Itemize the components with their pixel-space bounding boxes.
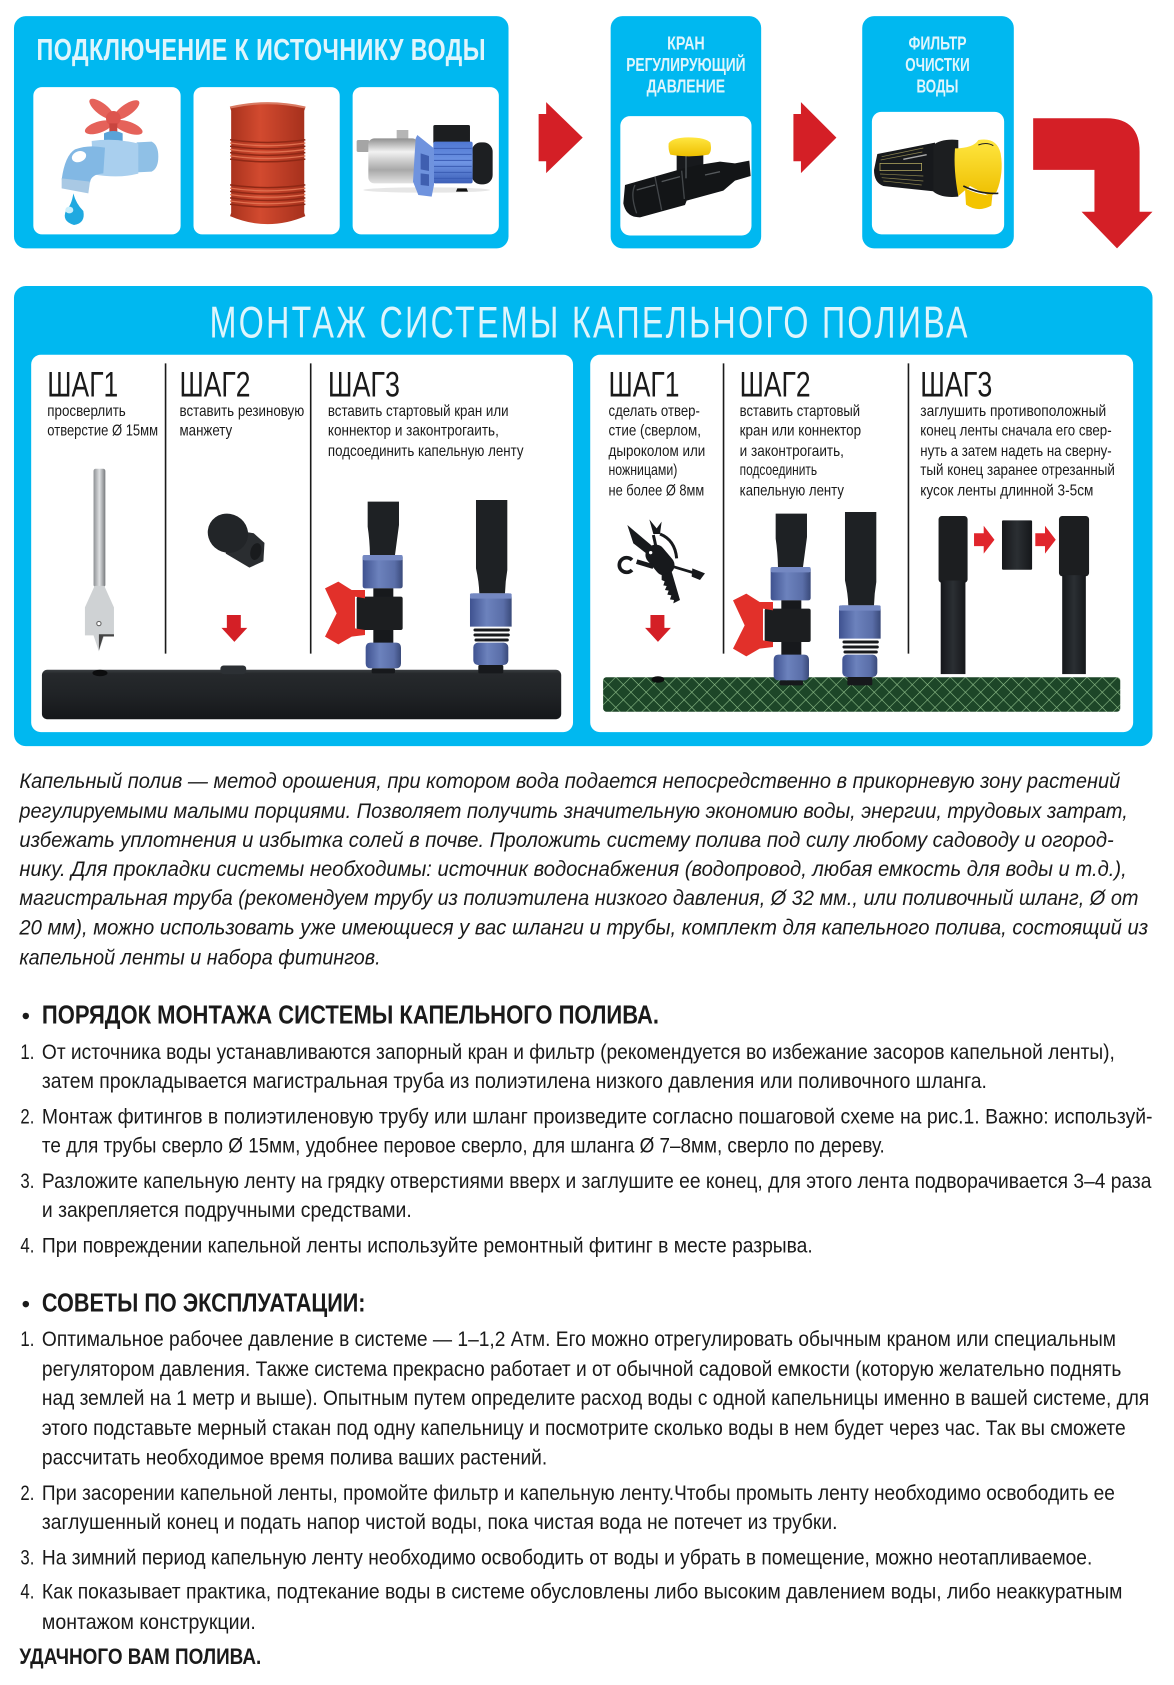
- card: barrel: [194, 87, 340, 234]
- step 1 text: отверстие Ø 15мм: [47, 422, 158, 439]
- tape sleeve: [1002, 520, 1032, 570]
- step 1 text: ШАГ1: [47, 365, 118, 405]
- heading: filter: ОЧИСТКИ: [905, 54, 970, 75]
- step 3 text: вставить стартовый кран или: [328, 403, 509, 420]
- step 2 text: вставить резиновую: [180, 403, 305, 420]
- installation order list: 4.: [20, 1233, 34, 1257]
- step 1 text: сделать отвер-: [609, 403, 700, 420]
- step 3 text: ШАГ3: [920, 365, 992, 405]
- icon: spade drill bit: [85, 469, 114, 652]
- panel: water filter: [862, 16, 1014, 248]
- step 2 text: вставить стартовый: [740, 403, 860, 420]
- step 2 text: [740, 365, 861, 500]
- heading: filter: ВОДЫ: [917, 75, 958, 96]
- fitting: straight connector with tape: [839, 512, 881, 685]
- installation order list: и закрепляется подручными средствами.: [42, 1198, 412, 1222]
- heading: filter: [905, 32, 970, 96]
- step 1 text: [47, 365, 158, 439]
- step 3 text: конец ленты сначала его свер-: [920, 422, 1112, 439]
- step 3 text: нуть а затем надеть на сверну-: [920, 443, 1112, 460]
- operating tips list: заглушенный конец и подать напор чистой воды, пока чистая вода не потечет из трубки.: [42, 1510, 837, 1534]
- step 3 text: подсоединить капельную ленту: [328, 443, 524, 460]
- step 3 text: заглушить противоположный: [920, 403, 1106, 420]
- closing line: УДАЧНОГО ВАМ ПОЛИВА.: [19, 1644, 261, 1669]
- step 2 text: кран или коннектор: [740, 422, 861, 439]
- operating tips list: рассчитать необходимое время полива ваших растений.: [42, 1445, 547, 1469]
- step 3 text: кусок ленты длинной 3-5см: [920, 483, 1093, 500]
- heading: water source: ПОДКЛЮЧЕНИЕ К ИСТОЧНИКУ ВОДЫ: [37, 34, 486, 67]
- tape end: folded tape with plug: [939, 516, 968, 674]
- panel: pressure valve: [611, 16, 761, 248]
- panel: drip irrigation installation: [14, 286, 1152, 746]
- icon: multitool: [619, 519, 705, 603]
- card: valve photo: [620, 116, 751, 235]
- step 1 text: ШАГ1: [609, 365, 679, 405]
- installation order list: те для трубы сверло Ø 15мм, удобнее перовое сверло, для шланга Ø 7–8мм, сверло по дереву.: [42, 1134, 885, 1158]
- installation order list: [20, 1040, 1152, 1257]
- fitting: straight connector with tape: [470, 500, 512, 673]
- card: pump: [353, 87, 499, 234]
- operating tips list: монтажом конструкции.: [42, 1610, 256, 1634]
- step 1 text: [609, 365, 705, 500]
- arrow: L-shaped down: [1033, 118, 1152, 248]
- step 2 text: ШАГ2: [740, 365, 811, 405]
- operating tips list: 4.: [20, 1580, 34, 1604]
- installation order list: 3.: [20, 1169, 34, 1193]
- card: filter photo: [872, 112, 1004, 234]
- step 3 text: тый конец заранее отрезанный: [920, 462, 1115, 479]
- heading: valve: РЕГУЛИРУЮЩИЙ: [626, 54, 746, 75]
- step 3 text: коннектор и законтрогаить,: [328, 422, 499, 439]
- intro paragraph: капельной ленты и набора фитингов.: [19, 945, 381, 969]
- heading: installation order: ПОРЯДОК МОНТАЖА СИСТЕМЫ КАПЕЛЬНОГО ПОЛИВА.: [42, 1001, 659, 1029]
- arrow: to filter: [793, 102, 836, 173]
- panel: hose steps: [590, 355, 1133, 732]
- heading: filter: ФИЛЬТР: [908, 32, 967, 53]
- heading: valve: КРАН: [667, 32, 705, 53]
- intro paragraph: Капельный полив — метод орошения, при котором вода подается непосредственно в прикорневую зону растений: [19, 769, 1120, 793]
- step 1 text: дыроколом или: [609, 443, 705, 460]
- intro paragraph: избежать уплотнения и избытка солей в почве. Проложить систему полива под силу любому садоводу и огород-: [19, 828, 1114, 852]
- icon: red arrow: [1035, 526, 1056, 554]
- arrow: to valve: [539, 102, 583, 173]
- icon: red down arrow: [221, 615, 247, 642]
- step 2 text: ШАГ2: [180, 365, 250, 405]
- step 2 text: и законтрогаить,: [740, 443, 844, 460]
- operating tips list: 3.: [20, 1545, 34, 1569]
- heading: valve: [626, 32, 746, 96]
- step 3 text: [328, 365, 524, 460]
- installation order list: затем прокладывается магистральная труба из полиэтилена низкого давления или поливочного шланга.: [42, 1069, 987, 1093]
- card: faucet: [33, 87, 181, 234]
- heading: operating tips: СОВЕТЫ ПО ЭКСПЛУАТАЦИИ:: [42, 1290, 366, 1318]
- step 1 text: просверлить: [47, 403, 126, 420]
- intro paragraph: нику. Для прокладки системы необходимы: источник водоснабжения (водопровод, любая емкость для воды и т.д.),: [19, 857, 1127, 881]
- step 3 text: [920, 365, 1115, 500]
- pipe: [42, 670, 561, 719]
- installation order list: 1.: [20, 1040, 34, 1064]
- step 2 text: капельную ленту: [740, 483, 844, 500]
- installation order list: При повреждении капельной ленты используйте ремонтный фитинг в месте разрыва.: [42, 1233, 813, 1257]
- icon: red down arrow: [645, 615, 671, 642]
- fitting: tap connector with tape: [325, 502, 403, 673]
- fitting: tap connector with tape: [733, 514, 811, 685]
- icon: rubber cuff: [201, 506, 264, 568]
- step 1 text: ножницами): [609, 462, 677, 479]
- heading: valve: ДАВЛЕНИЕ: [647, 75, 725, 96]
- operating tips list: 2.: [20, 1481, 34, 1505]
- icon: red arrow: [974, 526, 994, 554]
- intro paragraph: [18, 769, 1148, 969]
- tape end: finished sleeve: [1059, 516, 1089, 674]
- installation order list: 2.: [20, 1104, 34, 1128]
- step 3 text: ШАГ3: [328, 365, 400, 405]
- operating tips list: 1.: [20, 1327, 34, 1351]
- panel: water source connection: [14, 16, 509, 248]
- step 2 text: подсоединить: [740, 462, 817, 479]
- hose: [603, 677, 1120, 712]
- step 1 text: стие (сверлом,: [609, 422, 701, 439]
- step 2 text: манжету: [180, 422, 232, 439]
- operating tips list: [20, 1327, 1149, 1634]
- step 2 text: [180, 365, 305, 439]
- step 1 text: не более Ø 8мм: [609, 483, 704, 500]
- panel: pipe steps: [31, 355, 573, 732]
